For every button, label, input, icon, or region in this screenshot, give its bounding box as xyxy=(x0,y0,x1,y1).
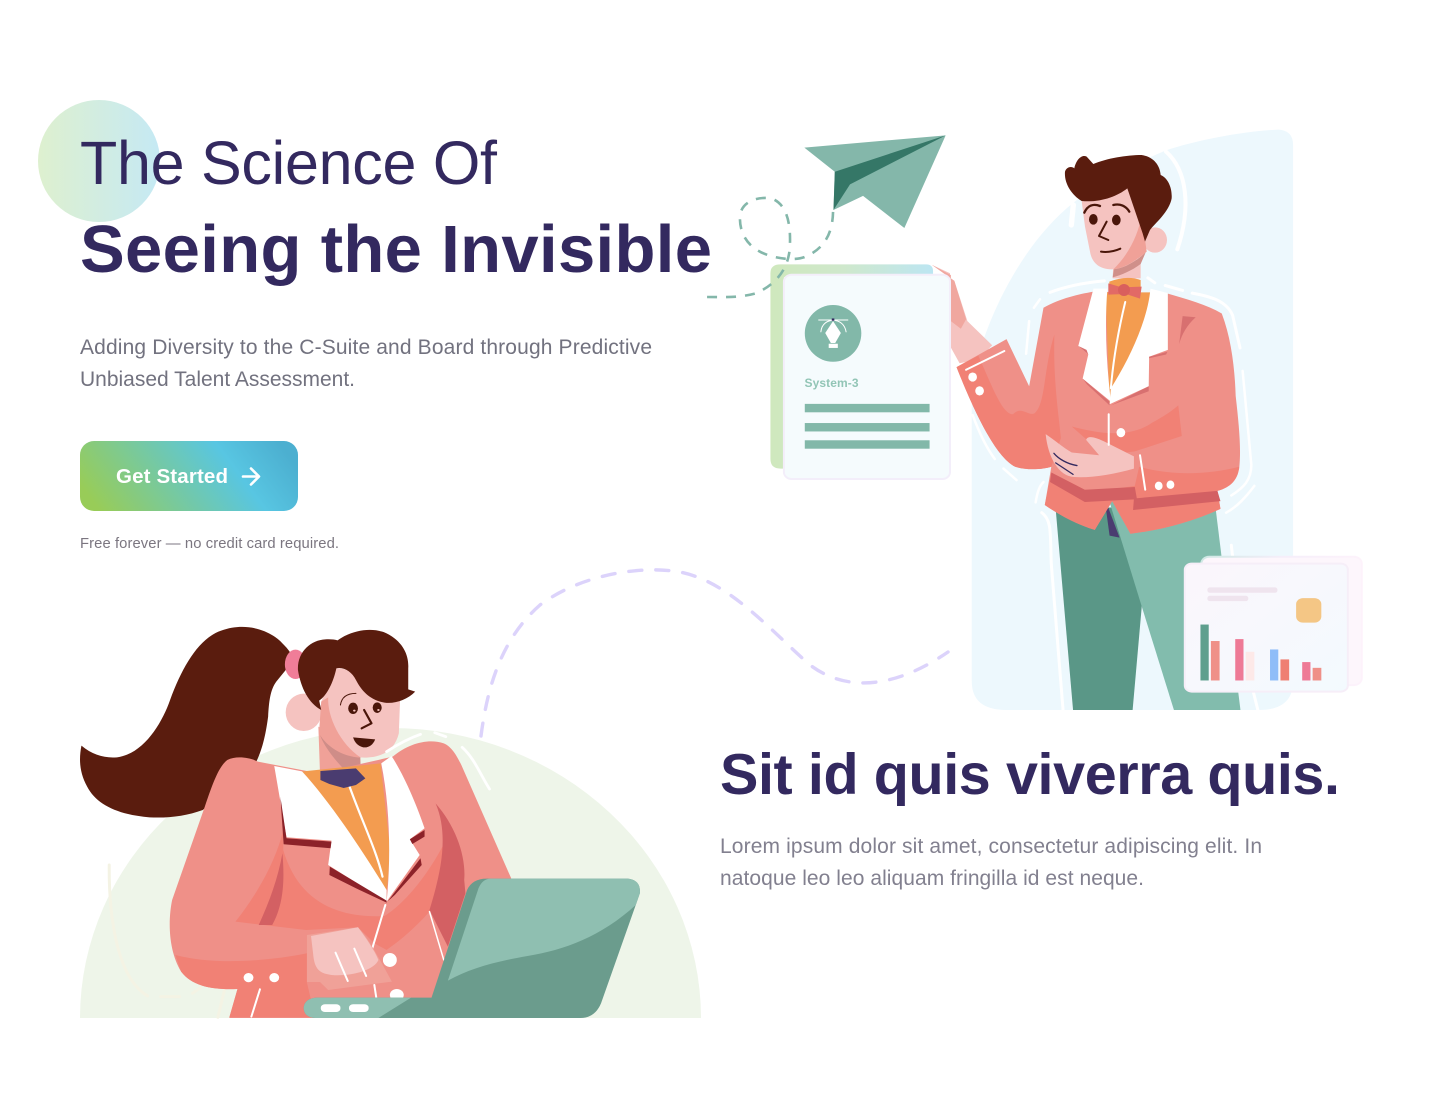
neck shadow xyxy=(1113,252,1146,277)
button: Get Started xyxy=(80,441,298,511)
section paragraph xyxy=(720,835,1262,890)
section paragraph: natoque leo leo aliquam fringilla id est neque. xyxy=(720,867,1144,890)
hair fringe xyxy=(298,630,415,710)
illustration: woman at laptop xyxy=(80,627,640,1018)
facial features xyxy=(340,693,382,747)
ear xyxy=(286,694,322,731)
dashed teal flight loop xyxy=(707,198,833,297)
shirt and lapels xyxy=(274,756,425,903)
paper plane xyxy=(804,135,946,228)
decorative gradient circle xyxy=(38,100,160,222)
document card xyxy=(784,275,950,479)
jacket xyxy=(957,292,1240,534)
bar chart xyxy=(1200,625,1321,680)
man's head and bow tie xyxy=(1065,152,1185,299)
cheek highlight xyxy=(1071,205,1073,225)
ponytail xyxy=(80,627,294,818)
chart card back sheet xyxy=(1201,557,1362,685)
icon: pen tool xyxy=(805,305,861,362)
jacket details and hand xyxy=(966,351,1174,490)
face xyxy=(321,668,400,758)
hair xyxy=(1065,155,1172,242)
shirt and collar xyxy=(1078,289,1168,405)
neck xyxy=(1113,263,1141,278)
note: free forever: Free forever — no credit card required. xyxy=(80,536,339,552)
bow knot xyxy=(1118,284,1130,296)
intro paragraph xyxy=(80,336,652,391)
label: System-3: System-3 xyxy=(804,376,859,390)
pale green dome xyxy=(80,728,701,1018)
light blue backdrop panel xyxy=(972,130,1293,710)
hand behind card xyxy=(932,265,992,363)
collar top in orange xyxy=(1109,278,1141,290)
ear xyxy=(1143,227,1167,253)
trousers xyxy=(1056,497,1240,710)
heading: Seeing the Invisible: Seeing the Invisible xyxy=(80,212,712,287)
face xyxy=(1082,188,1147,269)
document back sheet xyxy=(770,264,933,469)
illustration: man with document xyxy=(707,130,1362,710)
section paragraph: Lorem ipsum dolor sit amet, consectetur adipiscing elit. In xyxy=(720,835,1262,858)
scrunchie xyxy=(285,650,306,679)
face shadow xyxy=(1113,215,1147,269)
neck xyxy=(318,727,361,773)
hand xyxy=(307,927,392,990)
document lines xyxy=(805,404,930,449)
intro paragraph: Unbiased Talent Assessment. xyxy=(80,368,355,391)
faint chair outline xyxy=(109,865,224,1017)
intro paragraph: Adding Diversity to the C-Suite and Board through Predictive xyxy=(80,336,652,359)
chart card xyxy=(1185,564,1348,692)
button: Get Started: Get Started xyxy=(116,465,228,488)
dashed purple flight path xyxy=(481,570,948,736)
motion highlight strokes xyxy=(973,278,1258,710)
section heading: Sit id quis viverra quis.: Sit id quis viverra quis. xyxy=(720,743,1340,807)
jacket stitching and buttons xyxy=(244,905,404,1017)
eyes, brows, nose, mouth xyxy=(1084,205,1129,252)
highlight strokes xyxy=(387,733,490,789)
bow tie xyxy=(1108,283,1142,299)
head highlights xyxy=(1166,152,1185,249)
jacket xyxy=(170,741,511,1018)
neck bow xyxy=(320,768,365,788)
title: The Science Of: The Science Of xyxy=(80,129,498,197)
laptop xyxy=(304,879,640,1018)
